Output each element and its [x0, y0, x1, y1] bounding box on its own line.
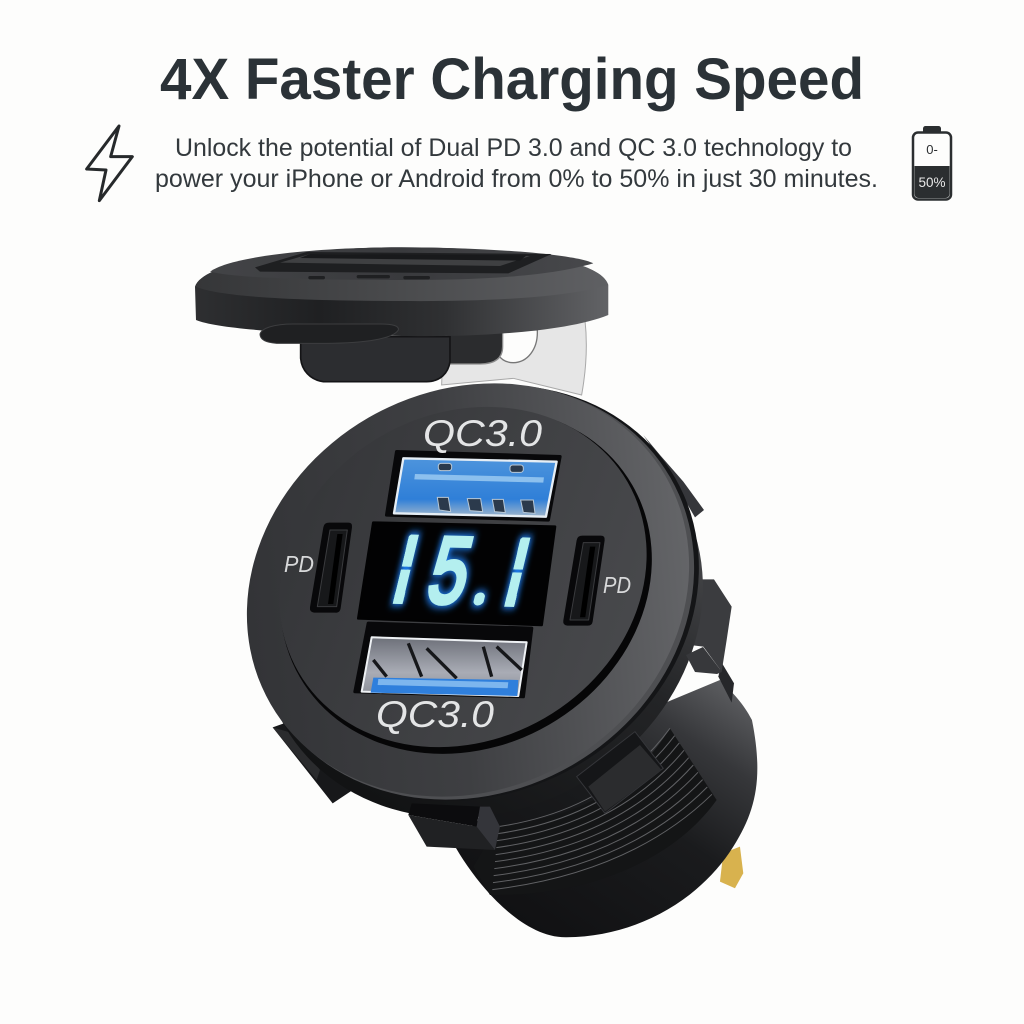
ports drawn in zoom coordinates	[310, 452, 605, 697]
inner plate	[217, 341, 709, 813]
plate shadow edge	[217, 341, 715, 821]
product: flange collar	[186, 327, 778, 897]
thread lines	[492, 728, 712, 890]
icon: lightning bolt	[87, 126, 132, 201]
title: 4X Faster Charging Speed	[160, 47, 864, 112]
product: USB charger faceplate	[246, 383, 699, 800]
description text: power your iPhone or Android from 0% to 50% in just 30 minutes.	[155, 165, 878, 193]
left USB-C port	[310, 523, 352, 613]
cap recess	[255, 252, 552, 273]
icon: battery 0 to 50 percent	[913, 126, 951, 200]
upper tab	[643, 435, 704, 517]
rim edge	[177, 305, 775, 881]
product: clips over flange	[408, 647, 722, 850]
description text	[155, 134, 878, 193]
tether loop hole	[498, 330, 537, 363]
label: QC3.0 bottom: QC3.0	[376, 694, 494, 735]
right USB-C port	[563, 536, 605, 626]
product: rear barrel with threads	[453, 680, 757, 937]
clip lower facet	[686, 647, 722, 674]
icon: battery 0 to 50 percent: 50%	[918, 175, 946, 190]
product: right side clips	[643, 435, 734, 703]
bottom clip	[408, 803, 500, 850]
cap plug rear	[447, 330, 503, 364]
top USB port	[387, 452, 560, 520]
cap chamfer band	[196, 247, 608, 301]
cap embossed marks	[308, 275, 430, 279]
description text: Unlock the potential of Dual PD 3.0 and QC 3.0 technology to	[175, 134, 852, 162]
voltage reading: 15.1	[373, 517, 548, 625]
rubber tether tab	[260, 324, 398, 343]
cap body rim	[195, 247, 608, 336]
voltage reading glow: 15.1	[373, 517, 548, 625]
cap top surface	[210, 247, 593, 280]
thread section	[473, 728, 717, 895]
bottom USB port	[355, 623, 532, 697]
barrel body	[453, 680, 757, 937]
thread clip	[577, 732, 663, 813]
brass terminal	[720, 847, 743, 888]
outer ring	[171, 304, 765, 876]
side clip	[687, 579, 732, 672]
ribbed tab	[718, 663, 734, 703]
cap plug front	[301, 337, 450, 382]
label: PD right: PD	[603, 572, 631, 598]
icon: battery 0 to 50 percent: 0-	[926, 142, 938, 157]
voltage display panel	[358, 523, 555, 625]
label: QC3.0 top: QC3.0	[423, 413, 542, 454]
product: storage cap	[195, 247, 608, 395]
product: left mounting tab	[273, 720, 357, 803]
label: PD left: PD	[284, 551, 314, 577]
metal tether strip	[442, 320, 586, 395]
